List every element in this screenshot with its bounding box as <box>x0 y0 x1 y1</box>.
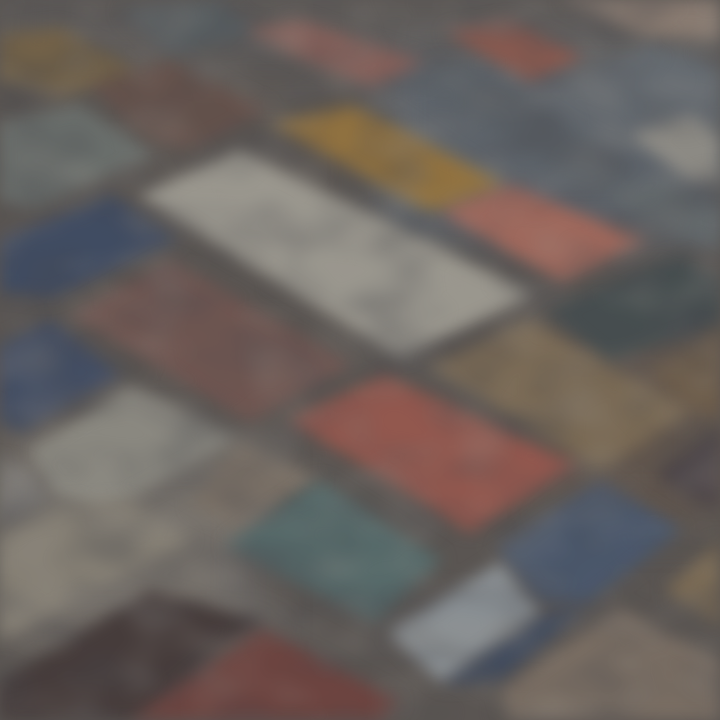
tile: blue surround <box>440 605 590 685</box>
tile: tan bottom-right <box>500 608 720 720</box>
tile: white lower-left <box>28 385 238 512</box>
tiles: middle rows <box>0 255 720 532</box>
tile: blue lower <box>498 480 682 602</box>
tile: far right brown <box>650 330 720 420</box>
tile: blue left <box>0 320 122 432</box>
tile: top salmon <box>245 20 425 88</box>
tile: upper-right blue grey <box>570 45 720 125</box>
tile: dark brown bottom-left <box>0 590 262 720</box>
tile: beige centre-left <box>190 440 320 530</box>
tile: top coral <box>445 20 585 82</box>
tile: tan right edge <box>665 540 720 625</box>
tile: right pale <box>630 115 720 185</box>
tile: top-left brown <box>90 60 270 150</box>
tile: red bottom <box>130 628 400 720</box>
tiles: lower rows <box>0 460 720 720</box>
tiles: upper rows <box>0 0 720 358</box>
tile: large white <box>138 150 535 358</box>
tile: top-left ochre <box>0 28 145 95</box>
tile: upper slate band <box>400 70 640 195</box>
tile: tan right <box>428 320 690 470</box>
tile: beige lower-left <box>0 500 190 640</box>
tile: pale blue-white <box>388 562 540 682</box>
tile: top slate <box>120 0 260 55</box>
tile: right slate <box>600 180 720 250</box>
tile: far right dark <box>655 430 720 505</box>
tile: left pale edge <box>0 460 50 525</box>
tile: top-right tan <box>560 0 720 40</box>
tile: dark teal right <box>545 255 720 362</box>
tile: teal <box>225 480 442 622</box>
tile: mauve brown <box>70 260 352 422</box>
tile: dark blue left <box>0 195 178 298</box>
tile: orange red <box>440 185 647 282</box>
tile: red <box>288 375 578 532</box>
tile: yellow <box>272 103 505 212</box>
tile: grey top-left <box>0 105 155 208</box>
